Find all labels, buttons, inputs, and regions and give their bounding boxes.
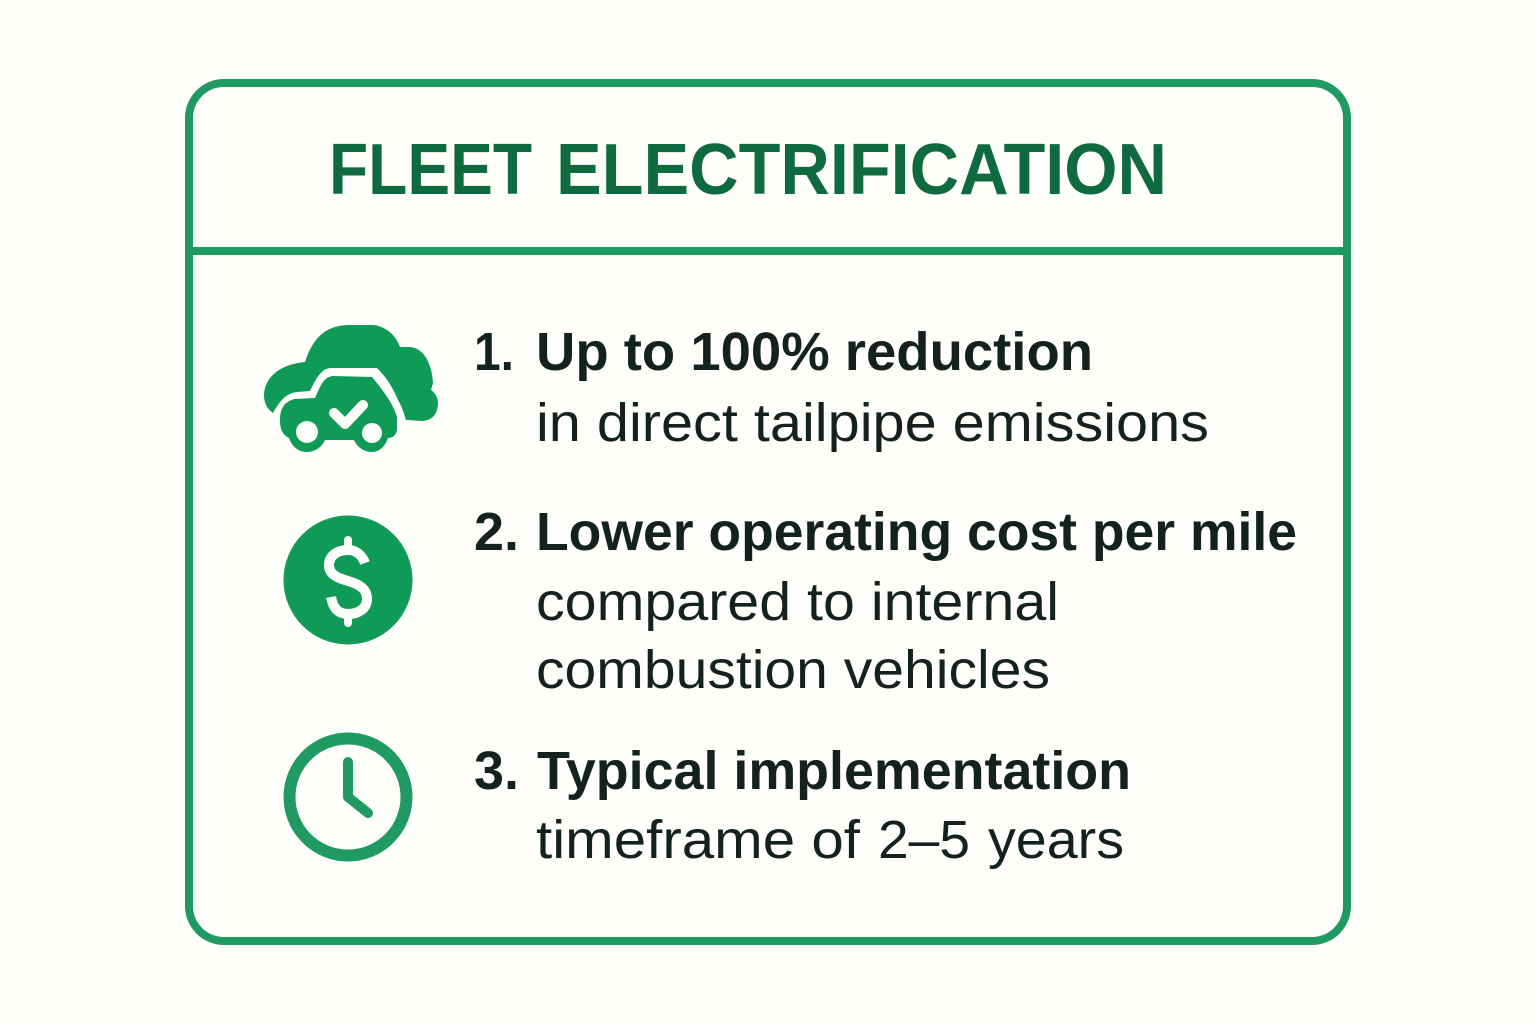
item 2 description line 1: compared to internal: [536, 572, 1059, 632]
item 2 number: 2.: [474, 502, 519, 562]
item 1 description: in direct tailpipe emissions: [536, 393, 1209, 453]
item 2 heading: Lower operating cost per mile: [536, 502, 1297, 562]
item 3 heading: Typical implementation: [537, 741, 1131, 801]
header divider: [189, 247, 1347, 255]
item 3 description: [536, 810, 1124, 870]
panel: card frame: [189, 83, 1347, 941]
item 3 description: 2–5: [878, 810, 970, 870]
icon: car with cloud and checkmark: [264, 325, 438, 452]
item 3 number: 3.: [474, 741, 519, 801]
item 2 description line 2: combustion vehicles: [536, 640, 1050, 700]
item 3 description: years: [988, 810, 1124, 870]
item 1 heading: Up to 100% reduction: [536, 322, 1093, 382]
icon: dollar coin: [284, 516, 412, 644]
item 1 number: 1.: [474, 322, 514, 382]
icon: clock: [290, 738, 406, 856]
title: FLEET: [329, 130, 532, 210]
title: ELECTRIFICATION: [556, 130, 1167, 210]
item 3 description: timeframe of: [536, 810, 861, 870]
